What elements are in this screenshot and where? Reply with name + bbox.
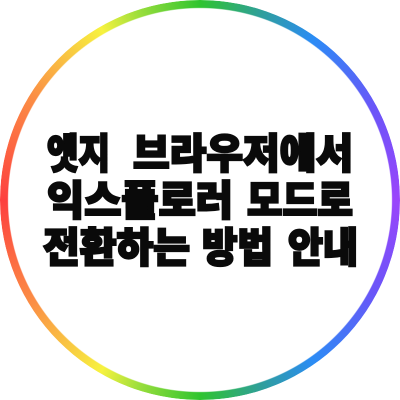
title line 3: 안내 xyxy=(288,225,358,271)
title line 1: 브라우저에서 xyxy=(133,131,353,177)
title line 3 xyxy=(43,225,358,271)
title line 2 xyxy=(47,178,353,224)
title line 1: 엣지 xyxy=(47,131,110,177)
title line 2: 익스플로러 xyxy=(47,178,233,224)
title line 3: 방법 xyxy=(202,225,273,271)
title line 3: 전환하는 xyxy=(43,225,190,271)
title line 2: 모드로 xyxy=(247,178,353,224)
